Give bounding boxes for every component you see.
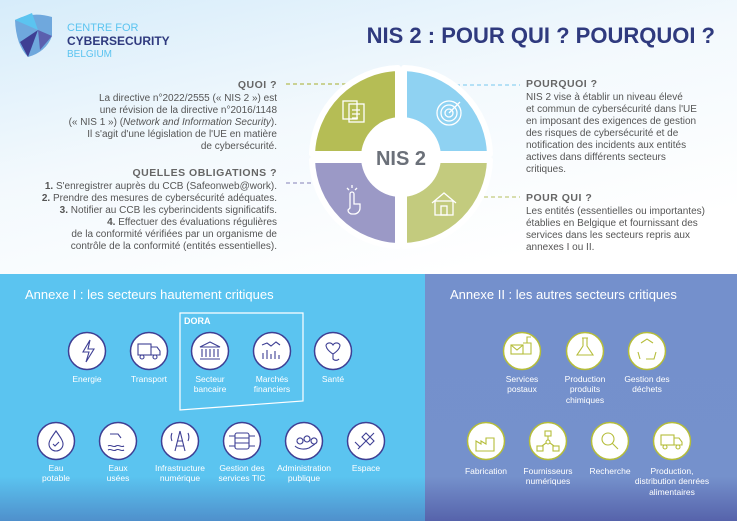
panel: annexe II: chimiques <box>566 395 604 405</box>
panel: annexe I: Infrastructure <box>155 463 205 473</box>
text block: quoi: de cybersécurité. <box>201 141 277 152</box>
panel: annexe I: potable <box>42 473 70 483</box>
panel: annexe II: Fournisseurs <box>523 466 573 476</box>
panel: annexe II: Gestion des <box>624 374 670 384</box>
panel: annexe I: Annexe I : les secteurs hautement critiques <box>25 287 274 302</box>
panel: annexe II <box>425 274 737 521</box>
text block: pourquoi: POURQUOI ? <box>526 78 598 90</box>
text block: quoi: Il s'agit d'une législation de l'UE en matière <box>87 129 277 140</box>
logo: CYBERSECURITY <box>67 34 170 48</box>
text block: pourquoi: actives dans différents secteurs <box>526 152 666 163</box>
DORA box: DORA <box>184 316 211 326</box>
panel: annexe II: Services <box>506 374 538 384</box>
panel: annexe I: Transport <box>131 374 168 384</box>
panel: annexe II: Production, <box>650 466 694 476</box>
text block: pour qui: annexes I ou II. <box>526 242 594 253</box>
panel: annexe I: Espace <box>352 463 380 473</box>
text block: quoi: une révision de la directive n°2016/1148 <box>100 105 277 116</box>
panel: annexe I <box>0 274 425 521</box>
panel: annexe I: Secteur <box>195 374 225 384</box>
text block: pour qui: services dans les secteurs repris aux <box>526 230 690 241</box>
text block: pour qui: établies en Belgique et fournissant des <box>526 218 698 229</box>
text block: obligations: 2. Prendre des mesures de cybersécurité adéquates. <box>42 193 277 204</box>
panel: annexe I: Energie <box>72 374 102 384</box>
panel: annexe II: Annexe II : les autres secteurs critiques <box>450 287 677 302</box>
text block: quoi: (« NIS 1 ») (Network and Information Security). <box>69 117 277 128</box>
panel: annexe I: financiers <box>254 384 290 394</box>
text block: obligations: 4. Effectuer des évaluations régulières <box>107 217 277 228</box>
logo <box>15 13 170 60</box>
text block: obligations: 3. Notifier au CCB les cyberincidents significatifs. <box>60 205 277 216</box>
text block: obligations <box>42 167 277 252</box>
title: NIS 2 : POUR QUI ? POURQUOI ? <box>367 23 715 48</box>
panel: annexe I: Santé <box>322 374 344 384</box>
text block: pourquoi: critiques. <box>526 164 566 175</box>
icon: hand <box>347 185 360 214</box>
panel: annexe II: postaux <box>507 384 538 394</box>
logo: BELGIUM <box>67 49 112 60</box>
panel: annexe II: produits <box>570 384 600 394</box>
text block: obligations: 1. S'enregistrer auprès du CCB (Safeonweb@work). <box>45 181 277 192</box>
NIS 2 wheel <box>312 68 490 246</box>
panel: annexe II: Production <box>565 374 606 384</box>
NIS 2 wheel: NIS 2 <box>376 148 426 170</box>
panel: annexe I: Administration <box>277 463 331 473</box>
panel: annexe II: Recherche <box>589 466 631 476</box>
panel: annexe I: publique <box>288 473 320 483</box>
panel: annexe I: usées <box>107 473 129 483</box>
text block: pour qui <box>526 192 705 253</box>
panel: annexe II: déchets <box>632 384 662 394</box>
icon: house <box>432 193 456 215</box>
text block: pourquoi: notification des incidents aux entités <box>526 140 686 151</box>
panel: annexe II: alimentaires <box>649 487 695 497</box>
text block: obligations: QUELLES OBLIGATIONS ? <box>133 167 277 179</box>
text block: obligations: de la conformité vérifiées par un organisme de <box>71 229 277 240</box>
text block: pourquoi: en imposant des exigences de gestion <box>526 116 696 127</box>
icon: target <box>437 101 461 125</box>
dashed connectors <box>286 84 520 197</box>
panel: annexe I: numérique <box>160 473 200 483</box>
panel: annexe I: Eaux <box>108 463 128 473</box>
text block: pour qui: Les entités (essentielles ou importantes) <box>526 206 705 217</box>
text block: pourquoi: et commun de cybersécurité dans l'UE <box>526 104 697 115</box>
panel: annexe I: services TIC <box>218 473 266 483</box>
panel: annexe II: numériques <box>526 476 570 486</box>
text block: quoi <box>69 79 277 152</box>
DORA box <box>180 313 303 410</box>
text block: quoi: QUOI ? <box>238 79 277 91</box>
panel: annexe II: Fabrication <box>465 466 507 476</box>
icon: document <box>343 101 364 122</box>
panel: annexe I: Gestion des <box>219 463 265 473</box>
text block: obligations: contrôle de la conformité (entités essentielles). <box>71 241 277 252</box>
panel: annexe II: distribution denrées <box>635 476 709 486</box>
text block: pourquoi: NIS 2 vise à établir un niveau élevé <box>526 92 683 103</box>
text block: pour qui: POUR QUI ? <box>526 192 592 204</box>
text block: pourquoi: des risques de cybersécurité et de <box>526 128 679 139</box>
panel: annexe I: Eau <box>48 463 64 473</box>
panel: annexe I: bancaire <box>194 384 227 394</box>
text block: quoi: La directive n°2022/2555 (« NIS 2 ») est <box>99 93 277 104</box>
text block: pourquoi <box>526 78 697 175</box>
panel: annexe I: Marchés <box>256 374 288 384</box>
logo: CENTRE FOR <box>67 22 139 34</box>
